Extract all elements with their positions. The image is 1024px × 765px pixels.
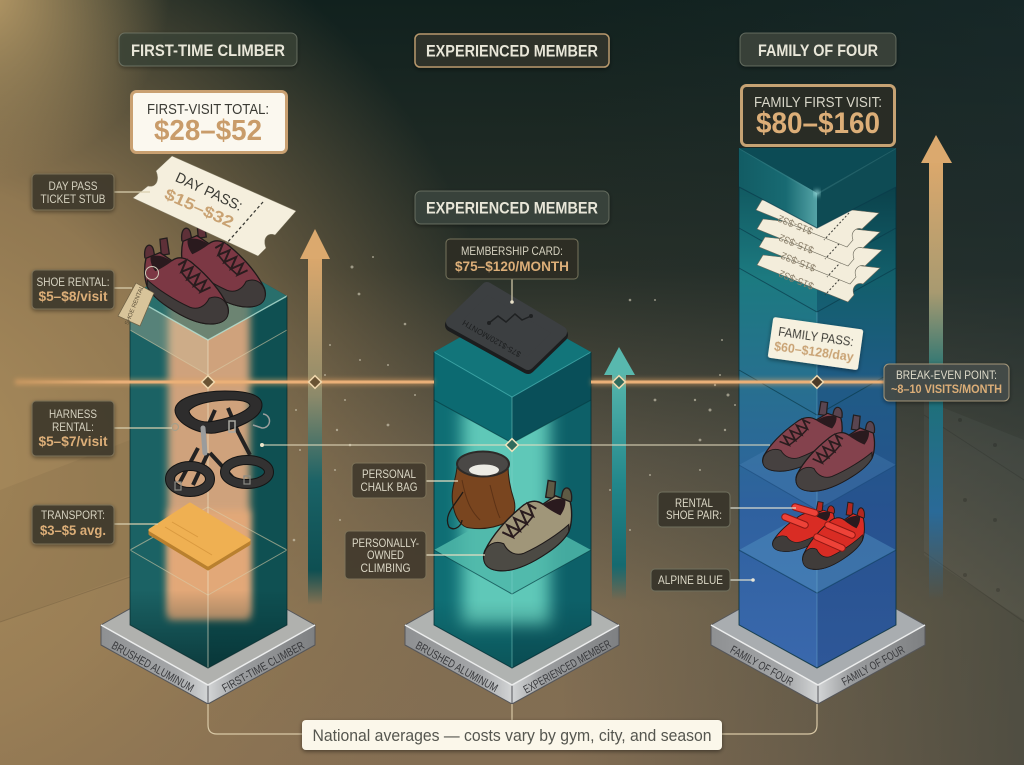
label: alpine blue — [651, 569, 755, 591]
icon: maroon shoes in family column — [763, 401, 875, 491]
icon: shoe tag — [118, 266, 158, 326]
diamond marker: family — [811, 376, 823, 388]
label: membership card: $75–$120/MONTH — [455, 258, 569, 274]
label: personal chalk bag: CHALK BAG — [360, 480, 418, 494]
family tickets stack — [756, 200, 882, 302]
icon: day pass ticket — [133, 156, 296, 256]
heading: experienced member — [415, 34, 609, 67]
platform: family of four: FAMILY OF FOUR — [840, 644, 907, 689]
label: personal chalk bag: PERSONAL — [362, 467, 416, 481]
secondary link line — [260, 439, 770, 451]
label: transport: TRANSPORT: — [41, 508, 105, 522]
break-even line — [15, 376, 886, 388]
label: harness rental: RENTAL: — [52, 420, 94, 434]
total card: family first visit — [742, 86, 894, 146]
icon: chalk bag — [447, 452, 515, 529]
column headings row — [119, 33, 896, 67]
label: personal chalk bag — [352, 463, 458, 498]
label: rental shoe pair: SHOE PAIR: — [666, 508, 722, 522]
column: experienced member — [434, 300, 591, 670]
label: rental shoe pair: RENTAL — [675, 496, 713, 510]
diamond marker: first-time — [202, 376, 214, 388]
label: harness rental: $5–$7/visit — [38, 433, 108, 449]
icon: shoe tag: SHOE RENTAL — [124, 284, 146, 326]
icon: personally-owned climbing shoe — [484, 480, 572, 571]
label: harness rental: HARNESS — [49, 407, 97, 421]
platform: experienced member: EXPERIENCED MEMBER — [522, 638, 613, 696]
label: break-even point: ~8–10 VISITS/MONTH — [891, 382, 1002, 396]
total card: family first visit: $80–$160 — [756, 107, 880, 140]
label: day pass ticket stub: DAY PASS — [48, 179, 98, 193]
total card: family first visit: FAMILY FIRST VISIT: — [754, 95, 882, 111]
label: personally-owned climbing: CLIMBING — [360, 561, 410, 575]
label: transport — [32, 505, 158, 544]
heading: experienced member second tag — [415, 191, 609, 224]
label: alpine blue: ALPINE BLUE — [658, 573, 723, 587]
label: shoe rental: SHOE RENTAL: — [36, 275, 110, 289]
label: transport: $3–$5 avg. — [40, 522, 106, 538]
total card: first visit: FIRST-VISIT TOTAL: — [147, 101, 269, 118]
label: shoe rental — [32, 270, 132, 309]
platform: family of four — [711, 565, 925, 704]
diamond marker: arrow 1 — [309, 376, 321, 388]
heading: first-time climber — [119, 33, 297, 66]
icon: day pass ticket: $15–$32 — [162, 186, 236, 232]
platform: experienced member — [405, 565, 619, 704]
label: personally-owned climbing: OWNED — [367, 548, 404, 562]
footnote: National averages — costs vary by gym, city, and season — [312, 726, 712, 745]
label: personally-owned climbing — [345, 531, 485, 579]
label: rental shoe pair — [658, 492, 796, 527]
icon: maroon rental shoes — [145, 221, 265, 324]
column: family of four — [739, 148, 896, 668]
label: harness rental — [32, 401, 172, 456]
callout: family pass — [768, 317, 863, 370]
icon: black membership card — [452, 288, 561, 367]
footnote bracket — [208, 704, 817, 734]
heading: family of four: FAMILY OF FOUR — [758, 42, 878, 60]
heading: experienced member second tag: EXPERIENCED MEMBER — [426, 200, 598, 218]
label: break-even point: BREAK-EVEN POINT: — [896, 368, 997, 382]
diamond marker: arrow 2 — [613, 376, 625, 388]
label: break-even point — [884, 364, 1009, 401]
cube cap over family tickets — [739, 148, 896, 228]
icon: day pass ticket: DAY PASS: — [173, 170, 245, 215]
footnote — [302, 720, 722, 750]
callout: family pass: $60–$128/day — [773, 338, 855, 365]
heading: first-time climber: FIRST-TIME CLIMBER — [131, 42, 285, 60]
growth arrow: first-time climber — [300, 229, 330, 605]
growth arrow: experienced member — [604, 347, 635, 600]
label: personally-owned climbing: PERSONALLY- — [352, 536, 419, 550]
total card: first visit — [132, 92, 286, 152]
platform: experienced member: BRUSHED ALUMINUM — [413, 640, 500, 695]
platform: first-time climber — [101, 565, 315, 704]
icon: gold transport card — [150, 504, 249, 569]
total card: first visit: $28–$52 — [154, 115, 262, 147]
platform: first-time climber: BRUSHED ALUMINUM — [109, 640, 196, 695]
label: membership card — [446, 239, 578, 304]
label: day pass ticket stub: TICKET STUB — [40, 192, 106, 206]
icon: climbing harness — [170, 391, 270, 492]
icon: black membership card: $75-$120/MONTH — [461, 318, 523, 359]
platform: family of four: FAMILY OF FOUR — [728, 644, 795, 689]
callout: family pass: FAMILY PASS: — [777, 324, 855, 349]
label: day pass ticket stub — [32, 174, 150, 210]
platform: first-time climber: FIRST-TIME CLIMBER — [220, 640, 307, 695]
column: first-time climber — [130, 250, 287, 670]
heading: experienced member: EXPERIENCED MEMBER — [426, 42, 598, 60]
label: shoe rental: $5–$8/visit — [38, 288, 108, 304]
icon: red kids shoes — [773, 502, 864, 569]
growth arrow: family of four — [921, 135, 952, 600]
label: membership card: MEMBERSHIP CARD: — [461, 244, 563, 258]
heading: family of four — [740, 33, 896, 66]
